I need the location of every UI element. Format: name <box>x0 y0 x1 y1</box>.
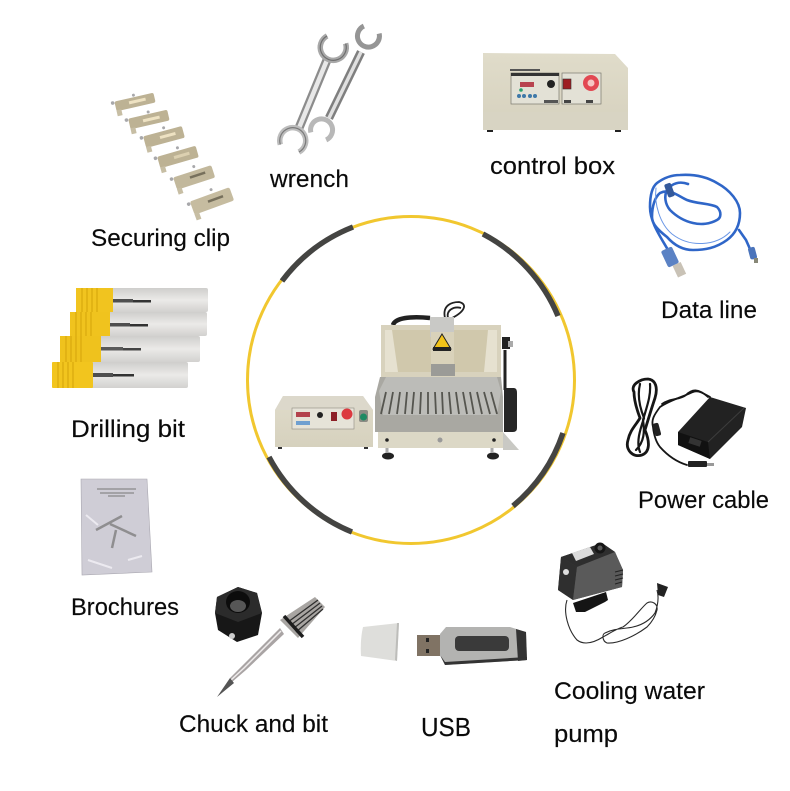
label: Data line: Data line <box>661 297 757 324</box>
drill case 2 <box>70 312 207 336</box>
label: Cooling water pump: pump <box>554 721 618 748</box>
label: Drilling bit: Drilling bit <box>71 416 185 443</box>
drill case 3 <box>60 336 200 362</box>
label: Chuck and bit: Chuck and bit <box>179 711 328 738</box>
ring around the machine <box>248 216 574 544</box>
machine body <box>375 302 519 460</box>
label: USB: USB <box>421 712 471 742</box>
icon: CNC machine with controller <box>275 302 519 460</box>
label: Power cable: Power cable <box>638 487 769 514</box>
icon: cooling water pump <box>558 542 668 643</box>
icon: wrenches <box>278 25 381 153</box>
icon: drilling bits in cases <box>52 288 208 388</box>
icon: control box <box>483 53 628 132</box>
label: Securing clip: Securing clip <box>91 225 230 252</box>
label: control box: control box <box>490 153 615 180</box>
icon: data line cable <box>650 175 758 278</box>
label: Cooling water pump: Cooling water <box>554 678 705 705</box>
icon: power adapter and cable <box>627 379 746 467</box>
label: Brochures: Brochures <box>71 594 179 621</box>
drill case 4 <box>52 362 188 388</box>
drill case 1 <box>76 288 208 312</box>
icon: brochure <box>81 479 152 575</box>
icon: securing clips <box>110 89 236 222</box>
label: Cooling water pump <box>554 678 705 748</box>
label: wrench: wrench <box>269 166 349 193</box>
icon: USB stick <box>361 623 527 665</box>
controller box <box>275 396 373 449</box>
icon: chuck nut and collet bit <box>215 587 325 697</box>
